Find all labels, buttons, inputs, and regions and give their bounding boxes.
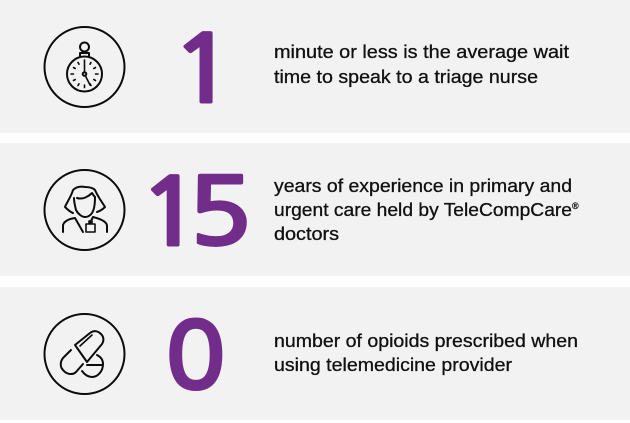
panel: opioids (0, 287, 630, 420)
text: experience description: ® (572, 201, 579, 211)
icon: stopwatch (44, 27, 124, 107)
text: experience description: doctors (274, 224, 339, 244)
text: experience description: years of experience in primary and (274, 176, 572, 196)
text: wait time description: time to speak to a triage nurse (274, 67, 538, 87)
panel: experience (0, 143, 630, 276)
text: opioids description (274, 331, 578, 375)
text: opioids description: using telemedicine provider (274, 355, 512, 375)
text: experience description (274, 176, 579, 244)
icon: doctor (44, 170, 124, 250)
panel: wait time (0, 0, 630, 133)
text: wait time description (274, 42, 569, 87)
text: experience description: urgent care held by TeleCompCare (274, 200, 572, 220)
text: opioids description: number of opioids prescribed when (274, 331, 578, 351)
number: 1: 1 (170, 25, 238, 117)
number: 0: 0 (164, 311, 227, 404)
icon: pills (44, 314, 124, 394)
text: wait time description: minute or less is the average wait (274, 42, 569, 62)
number: 15: 15 (137, 168, 253, 260)
